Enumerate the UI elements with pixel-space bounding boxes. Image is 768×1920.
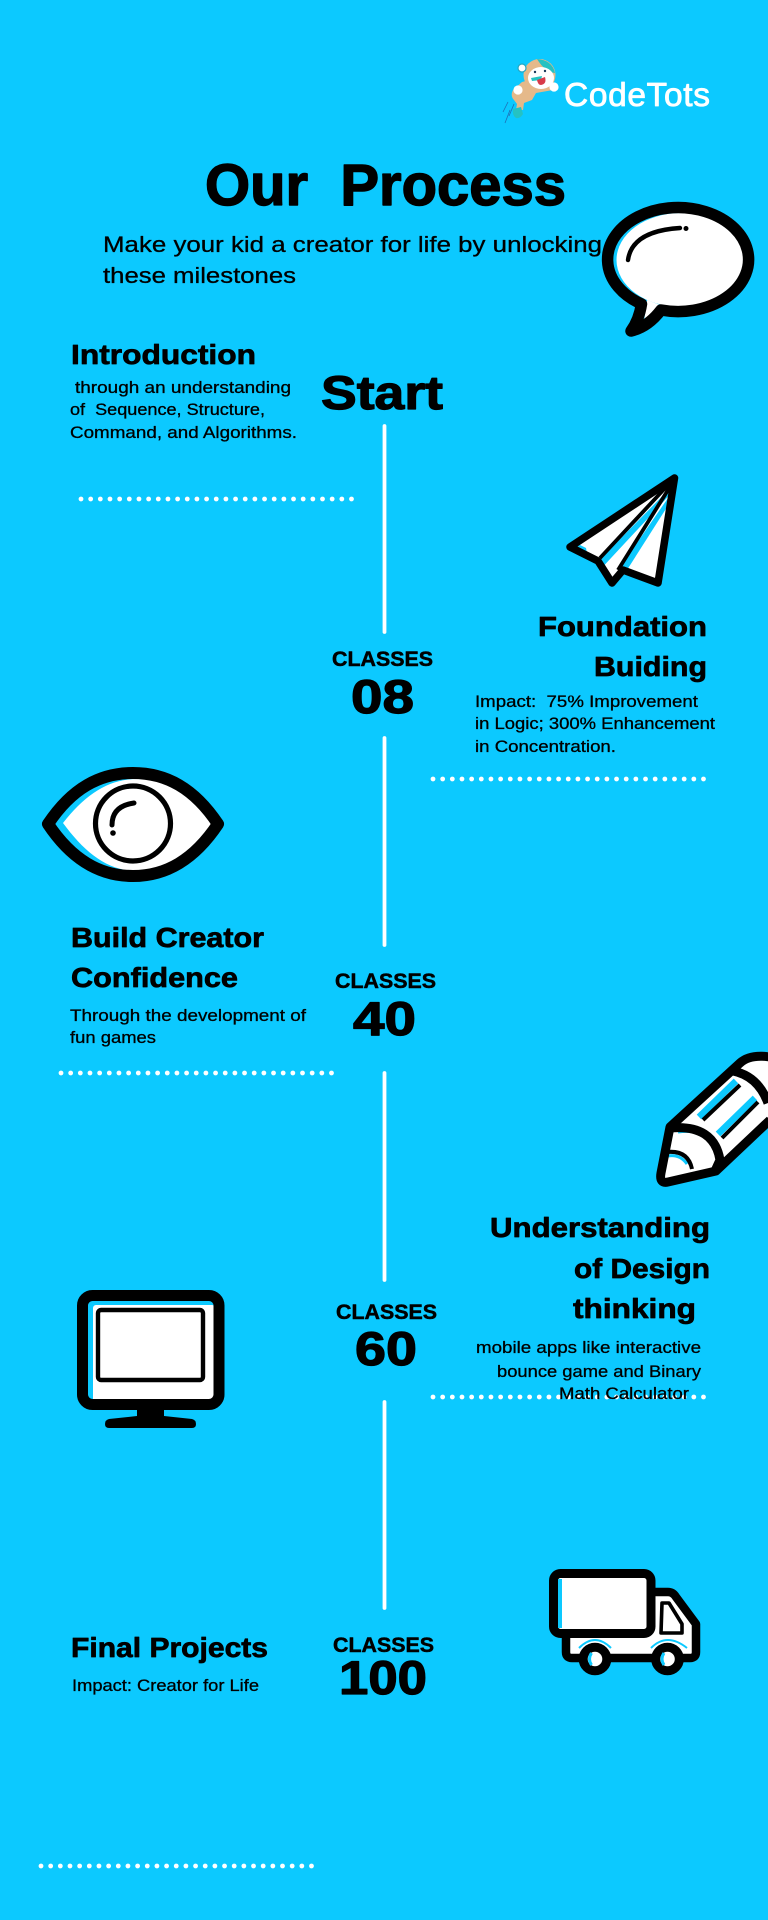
icon: astronaut mascot [503, 59, 559, 123]
subtitle: these milestones [103, 263, 296, 288]
heading: Foundation Buiding: Foundation [538, 611, 707, 642]
heading: Final Projects: Final Projects [71, 1632, 268, 1663]
milestone: classes 100 [333, 1634, 434, 1704]
logo: CodeTots [503, 59, 710, 123]
text: creator confidence description: Through the development of [70, 1007, 306, 1025]
milestone: classes 08: 08 [351, 670, 414, 723]
text: creator confidence description: fun games [70, 1029, 156, 1047]
panel: understanding of design thinking [476, 1212, 710, 1403]
icon: paper plane [570, 478, 674, 583]
text: design thinking description: bounce game and Binary [497, 1363, 702, 1381]
text: design thinking description [476, 1339, 702, 1403]
icon: speech bubble [608, 208, 749, 331]
label: Start: Start [321, 366, 443, 419]
text: introduction description: of Sequence, Structure, [70, 401, 265, 419]
milestone: classes 100: 100 [339, 1651, 427, 1704]
heading: Introduction: Introduction [71, 339, 256, 370]
heading: Foundation Buiding: Buiding [594, 651, 707, 682]
subtitle: Make your kid a creator for life by unlocking [103, 232, 602, 257]
heading: Understanding of Design thinking [490, 1212, 710, 1324]
text: foundation impact: in Concentration. [475, 738, 616, 756]
milestone: classes 08 [332, 648, 433, 723]
heading: Build Creator Confidence: Confidence [71, 962, 238, 993]
icon: pencil [661, 1056, 768, 1182]
text: foundation impact: Impact: 75% Improvement [475, 693, 698, 711]
panel: foundation building [475, 611, 715, 756]
milestone: classes 40: 40 [353, 992, 416, 1045]
milestone: classes 100: CLASSES [333, 1634, 434, 1657]
text: foundation impact [475, 693, 715, 756]
heading: Build Creator Confidence [71, 922, 264, 993]
heading: Understanding of Design thinking: thinking [573, 1293, 696, 1324]
milestone: classes 60: CLASSES [336, 1301, 437, 1324]
icon: monitor [82, 1296, 219, 1428]
text: introduction description: through an understanding [75, 379, 291, 397]
panel: build creator confidence [70, 922, 306, 1047]
text: foundation impact: in Logic; 300% Enhancement [475, 715, 715, 733]
icon: delivery truck [554, 1574, 696, 1671]
title: Our Process [205, 153, 566, 218]
heading: Understanding of Design thinking: Understanding [490, 1212, 710, 1243]
panel: introduction [70, 339, 297, 442]
milestone: classes 40: CLASSES [335, 970, 436, 993]
milestone: classes 08: CLASSES [332, 648, 433, 671]
text: design thinking description: Math Calculator [559, 1385, 690, 1403]
text: introduction description [70, 379, 297, 442]
milestone: classes 60: 60 [355, 1322, 417, 1375]
subtitle [103, 232, 602, 288]
text: final impact: Impact: Creator for Life [72, 1677, 259, 1695]
panel: final projects [71, 1632, 268, 1695]
divider dots [41, 499, 704, 1866]
heading: Understanding of Design thinking: of Design [574, 1253, 710, 1284]
milestone: classes 60 [336, 1301, 437, 1375]
logo wordmark: CodeTots [564, 77, 710, 114]
heading: Foundation Buiding [538, 611, 707, 682]
icon: eye [48, 773, 218, 876]
text: design thinking description: mobile apps like interactive [476, 1339, 701, 1357]
milestone: classes 40 [335, 970, 436, 1045]
text: creator confidence description [70, 1007, 306, 1047]
timeline: vertical line [383, 426, 386, 1608]
heading: Build Creator Confidence: Build Creator [71, 922, 264, 953]
text: introduction description: Command, and Algorithms. [70, 424, 297, 442]
